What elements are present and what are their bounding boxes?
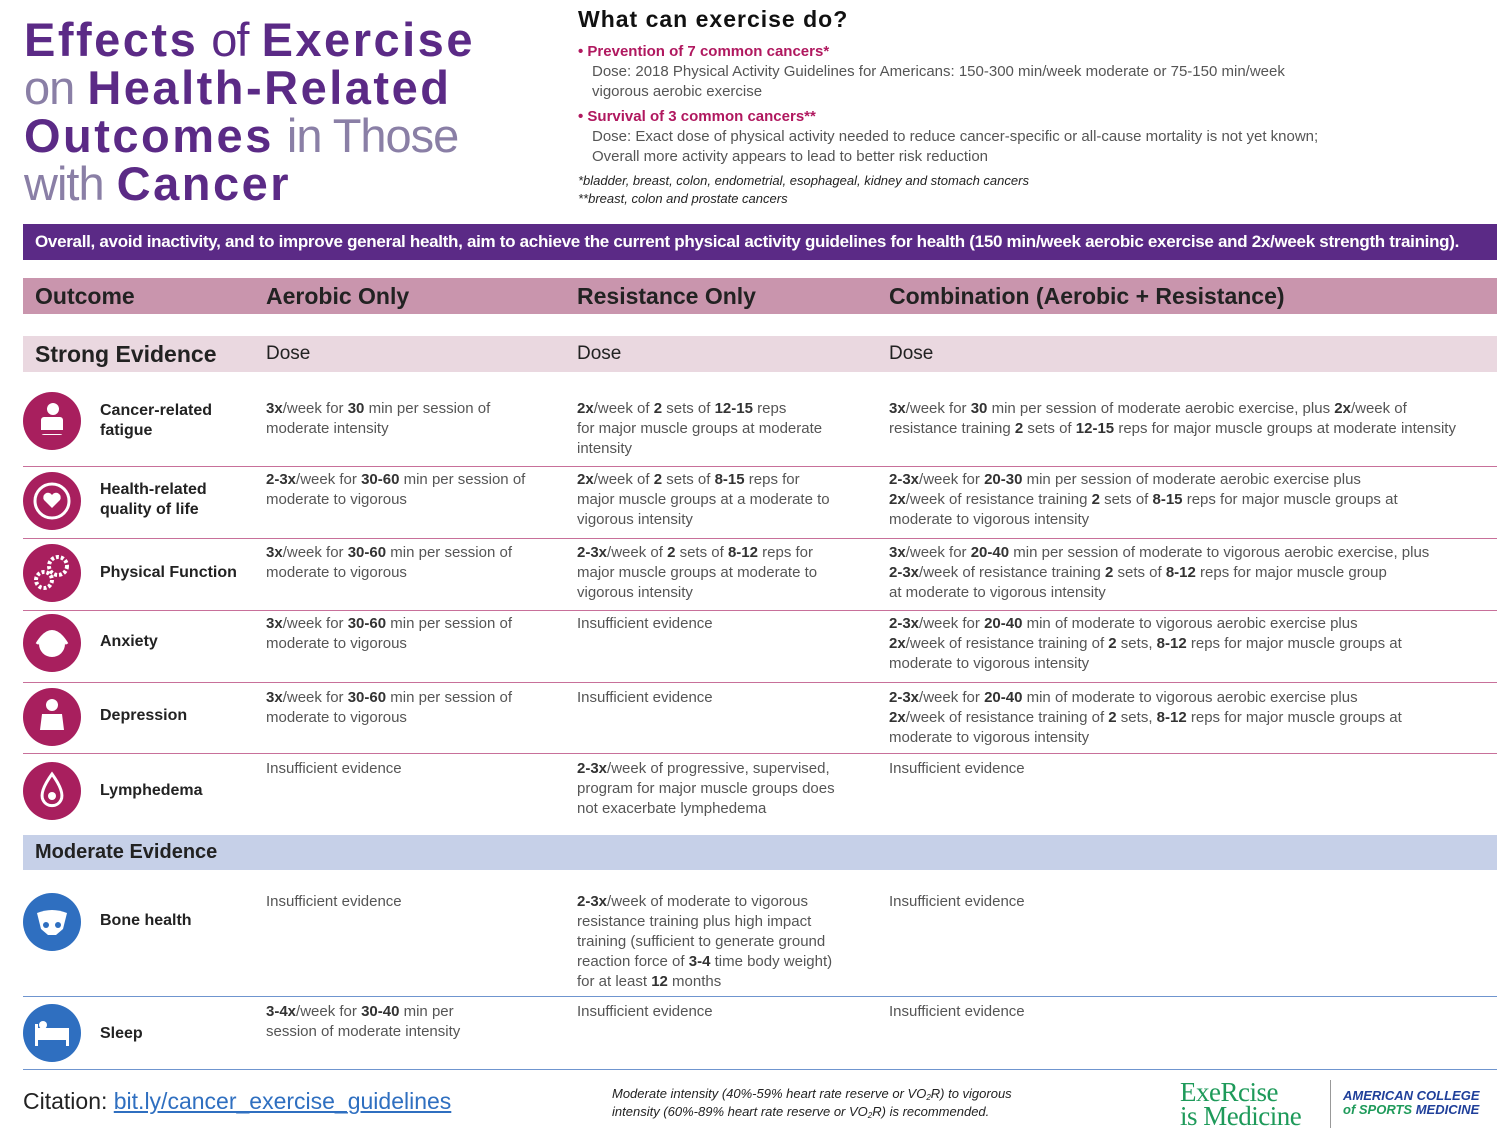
row: lymphedema: Insufficient evidence	[266, 760, 402, 777]
row: fatigue: 3x/week for 30 min per session of	[266, 400, 490, 417]
row: bone health: Bone health	[100, 912, 192, 929]
row: quality of life: quality of life	[100, 501, 199, 518]
row: physical function: Physical Function	[100, 564, 237, 581]
table header: Outcome	[35, 283, 135, 309]
row: bone health: Insufficient evidence	[266, 893, 402, 910]
what can exercise do panel: *bladder, breast, colon, endometrial, esophageal, kidney and stomach cancers	[578, 173, 1029, 188]
row: depression: Insufficient evidence	[577, 689, 713, 706]
row: lymphedema: Lymphedema	[100, 782, 203, 799]
banner	[23, 224, 1497, 260]
what can exercise do panel	[578, 6, 1318, 206]
row: quality of life: 2x/week of 2 sets of 8-15 reps for	[577, 471, 800, 488]
row: fatigue: for major muscle groups at moderate	[577, 420, 822, 437]
strong evidence band	[23, 336, 1497, 372]
row: quality of life: major muscle groups at a moderate to	[577, 491, 830, 508]
row: lymphedema: 2-3x/week of progressive, supervised,	[577, 760, 830, 777]
title	[24, 13, 475, 210]
row: physical function: at moderate to vigorous intensity	[889, 584, 1106, 601]
what can exercise do panel: Dose: Exact dose of physical activity needed to reduce cancer-specific or all-cause mortality is not yet known;	[592, 128, 1318, 145]
row: depression: moderate to vigorous intensity	[889, 729, 1089, 746]
strong evidence band: Dose	[266, 343, 310, 364]
row: fatigue: 2x/week of 2 sets of 12-15 reps	[577, 400, 786, 417]
row: physical function: vigorous intensity	[577, 584, 693, 601]
row: physical function: 3x/week for 30-60 min per session of	[266, 544, 512, 561]
row: lymphedema	[23, 760, 1025, 820]
row: fatigue: intensity	[577, 440, 632, 457]
row: physical function	[23, 544, 1429, 602]
moderate evidence band: Moderate Evidence	[35, 841, 217, 863]
row: quality of life: 2-3x/week for 20-30 min per session of moderate aerobic exercise plus	[889, 471, 1361, 488]
citation: Citation: bit.ly/cancer_exercise_guidelines	[23, 1088, 451, 1114]
row: depression: Depression	[100, 707, 187, 724]
row: lymphedema: Insufficient evidence	[889, 760, 1025, 777]
row: lymphedema: program for major muscle groups does	[577, 780, 835, 797]
row: bone health: training (sufficient to generate ground	[577, 933, 825, 950]
row: physical function: 3x/week for 20-40 min per session of moderate to vigorous aerobic exercise, plus	[889, 544, 1429, 561]
moderate evidence band	[23, 835, 1497, 870]
heading: What can exercise do?	[578, 6, 848, 32]
row: anxiety: moderate to vigorous	[266, 635, 407, 652]
row: quality of life: moderate to vigorous	[266, 491, 407, 508]
row: anxiety: Insufficient evidence	[577, 615, 713, 632]
icon: bed	[23, 1004, 81, 1062]
row: quality of life: 2-3x/week for 30-60 min per session of	[266, 471, 525, 488]
what can exercise do panel: **breast, colon and prostate cancers	[578, 191, 788, 206]
what can exercise do panel: • Survival of 3 common cancers**	[578, 108, 816, 125]
logo: ACSM: of SPORTS MEDICINE	[1343, 1102, 1479, 1117]
logo: ACSM	[1342, 1088, 1480, 1117]
row: physical function: major muscle groups at moderate to	[577, 564, 817, 581]
icon: drop	[23, 762, 81, 820]
row: bone health: resistance training plus high impact	[577, 913, 811, 930]
icon: gears	[23, 544, 81, 602]
logo: Exercise is Medicine: ExeRcise	[1180, 1077, 1278, 1107]
title: on Health-Related	[24, 61, 451, 114]
row: sleep: Insufficient evidence	[889, 1003, 1025, 1020]
footnote: intensity: Moderate intensity (40%-59% heart rate reserve or VO2R) to vigorous	[612, 1086, 1012, 1102]
row: bone health: for at least 12 months	[577, 973, 721, 990]
row: depression: moderate to vigorous	[266, 709, 407, 726]
title: Outcomes in Those	[24, 109, 458, 162]
icon: pelvis	[23, 893, 81, 951]
icon: fatigue	[23, 392, 81, 450]
row: sleep: session of moderate intensity	[266, 1023, 460, 1040]
footnote: intensity	[612, 1086, 1012, 1120]
row: physical function: 2-3x/week of resistance training 2 sets of 8-12 reps for major muscle group	[889, 564, 1387, 581]
what can exercise do panel: Overall more activity appears to lead to better risk reduction	[592, 148, 988, 165]
row: quality of life: Health-related	[100, 481, 207, 498]
row: depression: 2x/week of resistance training of 2 sets, 8-12 reps for major muscle groups at	[889, 709, 1402, 726]
logo: ACSM: AMERICAN COLLEGE	[1343, 1088, 1480, 1103]
footnote: intensity: intensity (60%-89% heart rate reserve or VO2R) is recommended.	[612, 1104, 989, 1120]
row: bone health	[23, 893, 1025, 990]
row: bone health: 2-3x/week of moderate to vigorous	[577, 893, 808, 910]
row: bone health: Insufficient evidence	[889, 893, 1025, 910]
row: quality of life: vigorous intensity	[577, 511, 693, 528]
strong evidence band: Strong Evidence	[35, 341, 216, 367]
table header: Combination (Aerobic + Resistance)	[889, 283, 1285, 309]
row: anxiety: 2-3x/week for 20-40 min of moderate to vigorous aerobic exercise plus	[889, 615, 1358, 632]
row: anxiety: 3x/week for 30-60 min per session of	[266, 615, 512, 632]
row: fatigue: Cancer-related	[100, 402, 212, 419]
row: fatigue: 3x/week for 30 min per session of moderate aerobic exercise, plus 2x/week of	[889, 400, 1407, 417]
row: quality of life	[23, 471, 1398, 530]
row: depression: 3x/week for 30-60 min per session of	[266, 689, 512, 706]
icon: face	[23, 614, 81, 672]
row: anxiety	[23, 614, 1402, 672]
row: physical function: moderate to vigorous	[266, 564, 407, 581]
row: sleep	[23, 1003, 1025, 1062]
row: fatigue: resistance training 2 sets of 12-15 reps for major muscle groups at moderate intensity	[889, 420, 1456, 437]
table header: Aerobic Only	[266, 283, 409, 309]
what can exercise do panel: • Prevention of 7 common cancers*	[578, 43, 829, 60]
what can exercise do panel: Dose: 2018 Physical Activity Guidelines for Americans: 150-300 min/week moderate or 75-150 min/week	[592, 63, 1285, 80]
row: sleep: 3-4x/week for 30-40 min per	[266, 1003, 454, 1020]
row: anxiety: 2x/week of resistance training of 2 sets, 8-12 reps for major muscle groups at	[889, 635, 1402, 652]
row: anxiety: moderate to vigorous intensity	[889, 655, 1089, 672]
row: sleep: Insufficient evidence	[577, 1003, 713, 1020]
table header: Resistance Only	[577, 283, 756, 309]
strong evidence band: Dose	[577, 343, 621, 364]
row: sleep: Sleep	[100, 1025, 143, 1042]
row: anxiety: Anxiety	[100, 633, 158, 650]
icon: sitting figure	[23, 688, 81, 746]
row: fatigue: moderate intensity	[266, 420, 389, 437]
logo: Exercise is Medicine: is Medicine	[1180, 1101, 1301, 1131]
title: Effects of Exercise	[24, 13, 475, 66]
row: fatigue	[23, 392, 1456, 457]
title: with Cancer	[24, 157, 291, 210]
row: bone health: reaction force of 3-4 time body weight)	[577, 953, 832, 970]
table header	[23, 278, 1497, 314]
row: depression: 2-3x/week for 20-40 min of moderate to vigorous aerobic exercise plus	[889, 689, 1358, 706]
what can exercise do panel: vigorous aerobic exercise	[592, 83, 762, 100]
row: quality of life: 2x/week of resistance training 2 sets of 8-15 reps for major muscle groups at	[889, 491, 1398, 508]
row: lymphedema: not exacerbate lymphedema	[577, 800, 766, 817]
row: physical function: 2-3x/week of 2 sets of 8-12 reps for	[577, 544, 813, 561]
icon: heart	[23, 472, 81, 530]
row: quality of life: moderate to vigorous intensity	[889, 511, 1089, 528]
logo: Exercise is Medicine	[1180, 1077, 1301, 1131]
strong evidence band: Dose	[889, 343, 933, 364]
row: fatigue: fatigue	[100, 422, 152, 439]
row: depression	[23, 688, 1402, 746]
banner: Overall, avoid inactivity, and to improve general health, aim to achieve the current physical activity guidelines for health (150 min/week aerobic exercise and 2x/week strength training).	[35, 232, 1459, 251]
